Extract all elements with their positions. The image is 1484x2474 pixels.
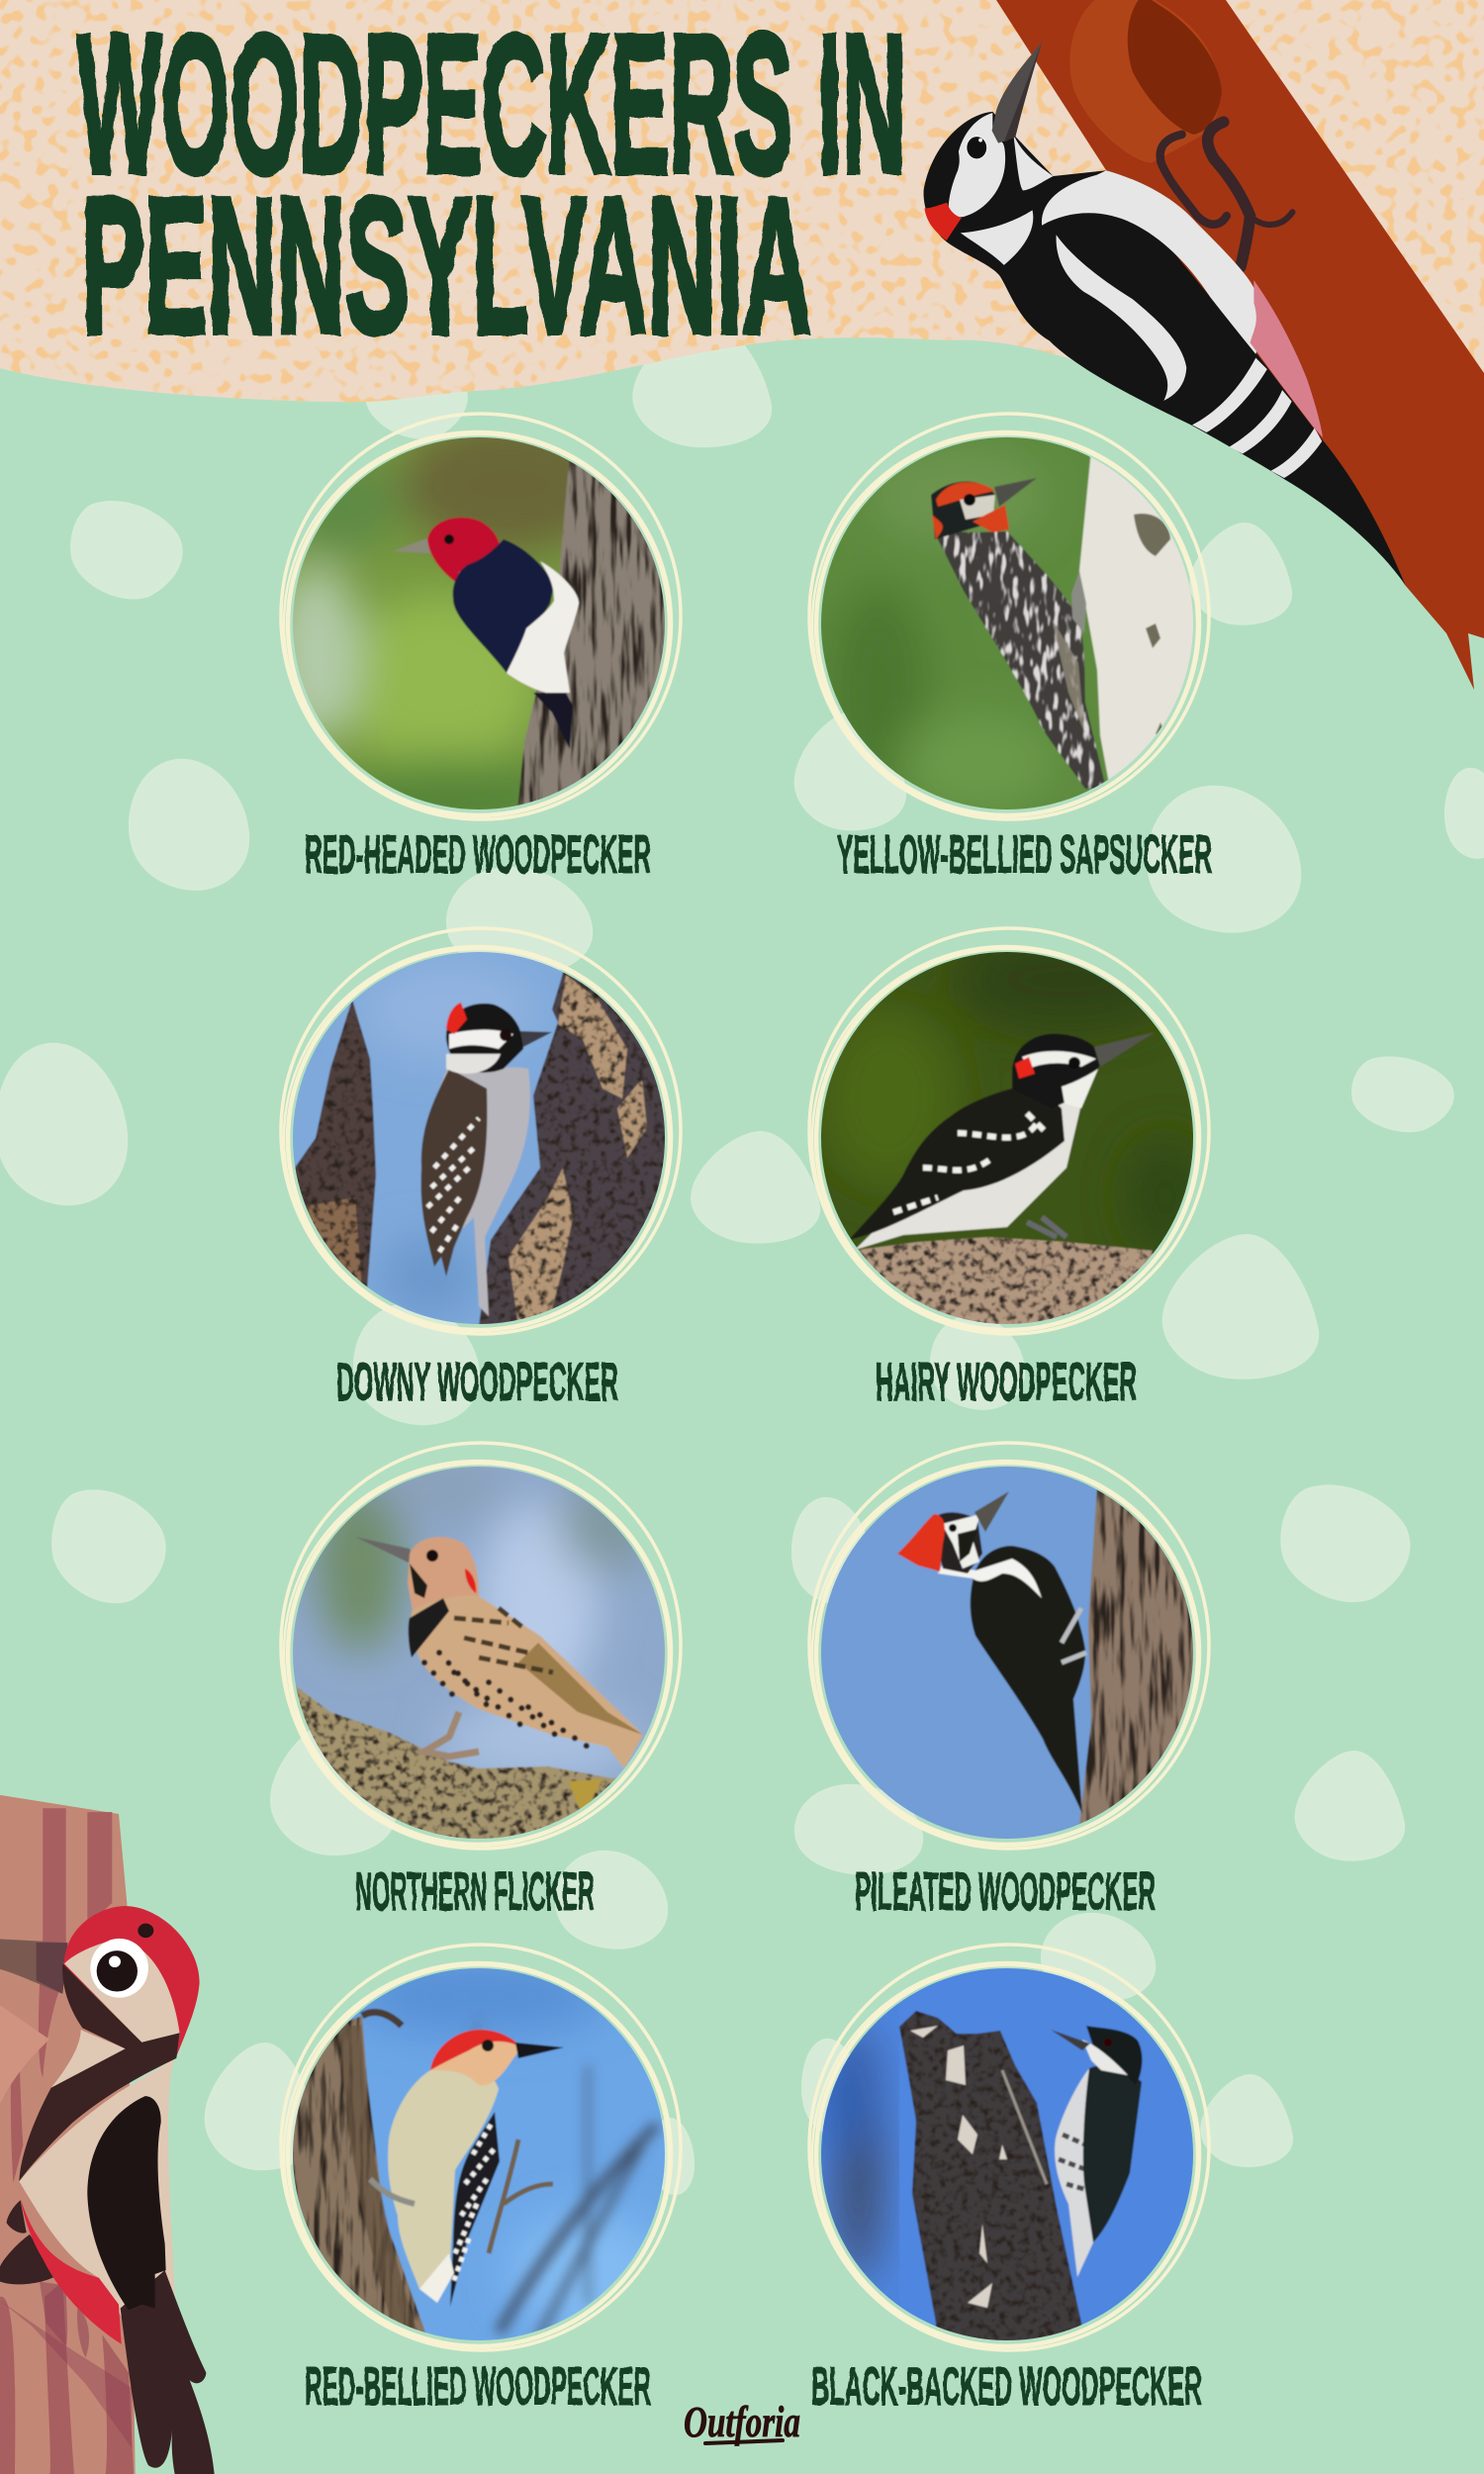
photo: red-bellied woodpecker: [281, 1945, 681, 2352]
background blobs: [0, 322, 1484, 2195]
title: [77, 0, 906, 374]
illustration: tree trunk top right: [996, 0, 1484, 690]
photo: pileated woodpecker: [809, 1443, 1209, 1851]
panel: northern flicker: [281, 1443, 681, 1922]
photo: hairy woodpecker: [809, 928, 1209, 1336]
panel: downy woodpecker: DOWNY WOODPECKER: [336, 1351, 618, 1412]
photo: black-backed woodpecker: [809, 1945, 1209, 2352]
panel: hairy woodpecker: HAIRY WOODPECKER: [876, 1351, 1137, 1412]
panel: red-headed woodpecker: [271, 414, 681, 885]
header sand band: [0, 0, 1484, 416]
panel: downy woodpecker: [281, 928, 681, 1412]
panel: red-bellied woodpecker: [281, 1945, 681, 2417]
illustration: woodpecker and trunk bottom left: [0, 1795, 215, 2474]
text: RED-BELLIED WOODPECKER: [305, 2355, 651, 2417]
panel: hairy woodpecker: [809, 928, 1209, 1412]
panel: yellow-bellied sapsucker: [809, 414, 1212, 885]
photo: downy woodpecker: [281, 928, 681, 1334]
panel: pileated woodpecker: [809, 1443, 1209, 1922]
panel: northern flicker: NORTHERN FLICKER: [355, 1860, 595, 1922]
photo: northern flicker: [281, 1443, 681, 1851]
photo: red-headed woodpecker: [271, 414, 681, 836]
logo: Outforia: Outforia: [684, 2398, 800, 2446]
text: RED-HEADED WOODPECKER: [305, 823, 651, 885]
illustration: woodpecker top right: [924, 43, 1405, 585]
panel: black-backed woodpecker: [809, 1945, 1209, 2417]
photo: yellow-bellied sapsucker: [809, 414, 1209, 821]
